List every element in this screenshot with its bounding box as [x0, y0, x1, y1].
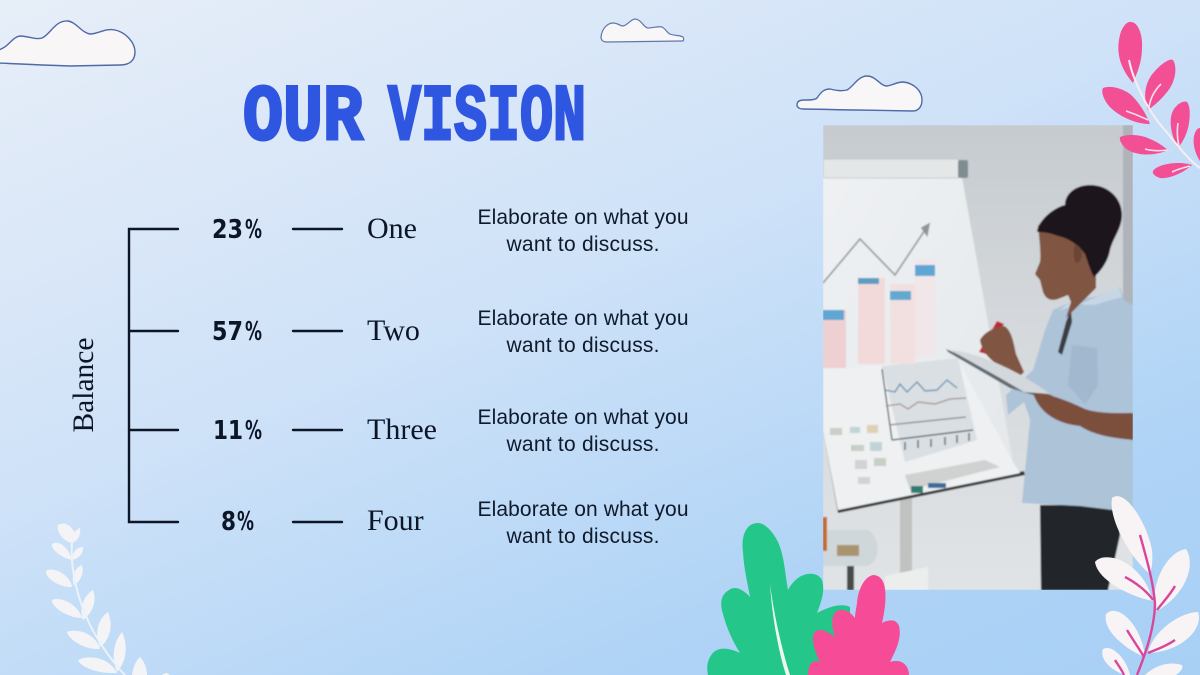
flipchart paper: [823, 177, 1020, 510]
percentage 23%: 23: [212, 215, 243, 245]
percentage 57%: %: [245, 317, 262, 347]
markers on tray: [911, 486, 923, 493]
row 2: [212, 307, 688, 357]
percentage 11%: %: [245, 416, 262, 446]
hair: [1037, 185, 1122, 277]
side table: [823, 517, 928, 590]
lower arm and hand: [1033, 393, 1133, 440]
label One: One: [367, 212, 417, 245]
flipchart board frame: [826, 448, 1026, 514]
percentage 11%: 11: [213, 416, 243, 446]
title: [243, 73, 586, 164]
mini charts on paper: [830, 425, 886, 484]
row 4: [221, 498, 688, 548]
description: Elaborate on what you: [478, 498, 688, 521]
pants: [1040, 505, 1120, 590]
row 3: [213, 406, 688, 456]
description: Elaborate on what you: [478, 406, 688, 429]
description: want to discuss.: [506, 525, 660, 548]
ear: [1074, 245, 1082, 263]
label Two: Two: [367, 314, 420, 347]
zigzag arrow: [823, 224, 929, 283]
label Four: Four: [367, 504, 424, 537]
bar chart on paper: [823, 260, 935, 368]
plant: white and pink branch bottom right: [1095, 496, 1199, 675]
line charts on paper: [882, 369, 973, 450]
plant: pink branch top right: [1102, 22, 1200, 178]
plant: white branch bottom left: [46, 524, 170, 675]
percentage 23%: %: [245, 215, 262, 245]
description: want to discuss.: [506, 334, 660, 357]
photo: woman presenting at flipchart: [823, 125, 1133, 590]
title: OUR: [243, 73, 363, 164]
description: want to discuss.: [506, 233, 660, 256]
percentage 8%: %: [237, 507, 254, 537]
raised hand and red marker: [979, 321, 1004, 354]
shirt: [1006, 287, 1133, 515]
bracket diagram: [129, 229, 342, 522]
title: VISION: [388, 73, 586, 164]
cloud: top left: [0, 21, 135, 66]
percentage 8%: 8: [221, 507, 236, 537]
neck and face: [1035, 225, 1096, 318]
clipboard: [946, 349, 1053, 400]
row 1: [212, 206, 688, 256]
description: Elaborate on what you: [478, 206, 688, 229]
cloud: top centre: [601, 19, 684, 42]
flipchart roller: [823, 159, 960, 178]
axis label: Balance: Balance: [68, 338, 100, 432]
plant: pink leaf: [808, 575, 909, 675]
plant: green leaf: [707, 523, 850, 675]
description: want to discuss.: [506, 433, 660, 456]
description: Elaborate on what you: [478, 307, 688, 330]
label Three: Three: [367, 413, 437, 446]
percentage 57%: 57: [212, 317, 243, 347]
cloud: top right: [797, 76, 922, 111]
flipchart stand: [900, 495, 912, 575]
